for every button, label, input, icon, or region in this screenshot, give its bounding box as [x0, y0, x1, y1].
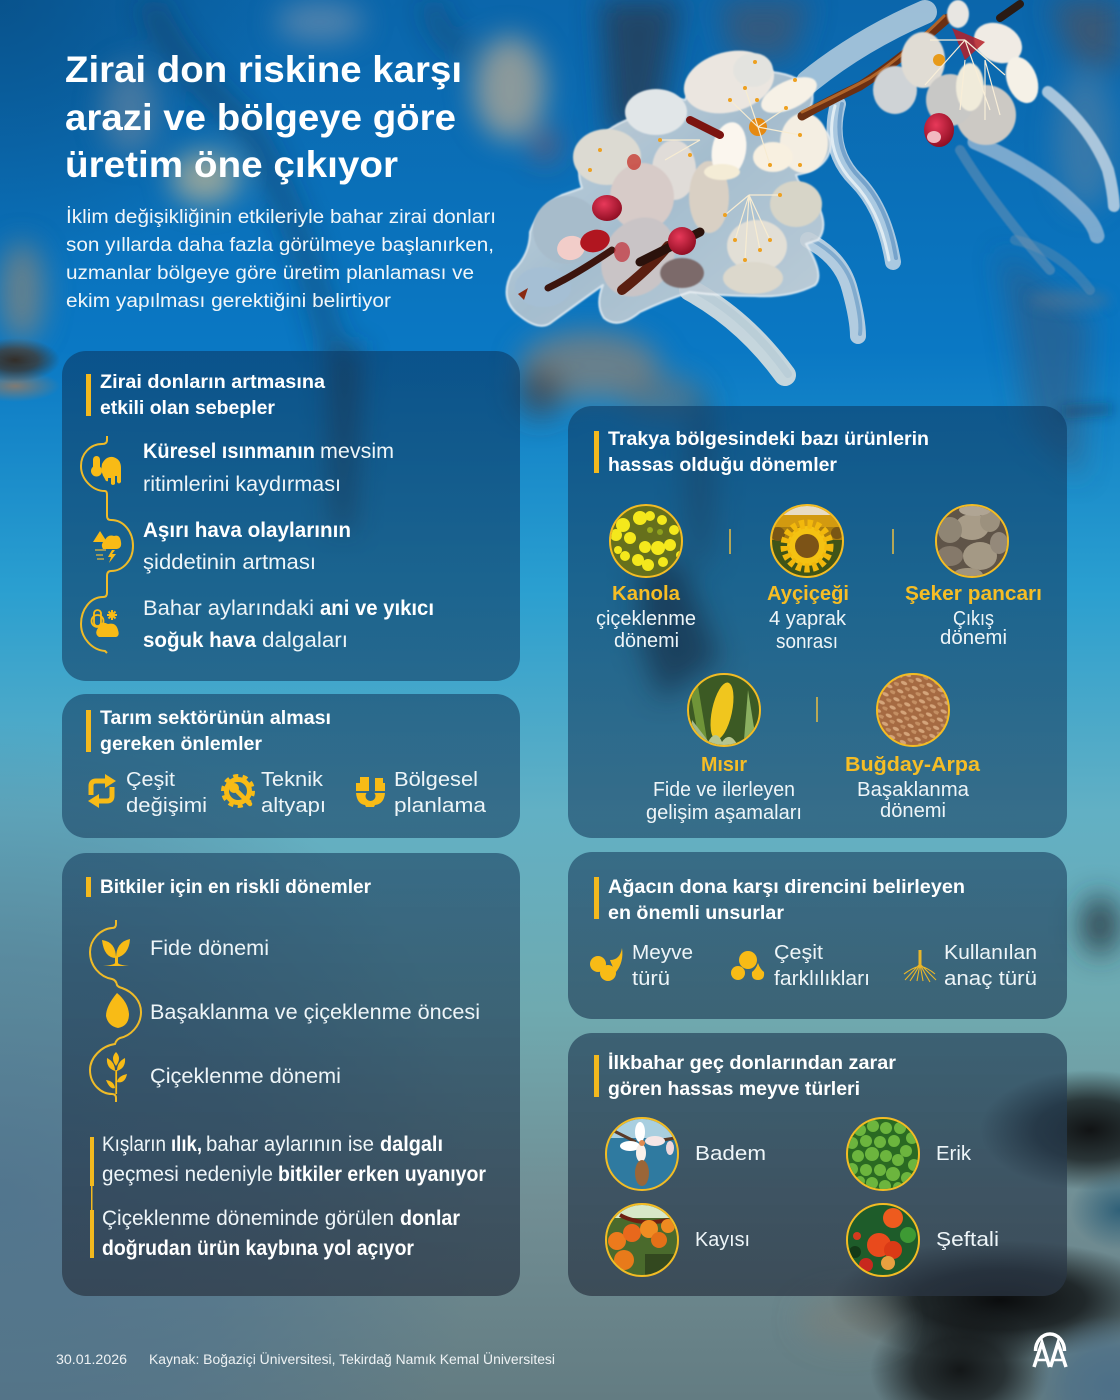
photo: wheat and barley: [877, 674, 949, 746]
logo: AA: [1034, 1334, 1066, 1367]
text: flowering period: Çiçeklenme dönemi: [150, 1065, 341, 1088]
buds: [518, 154, 696, 300]
note: mild winters: ılık,: [171, 1133, 202, 1156]
text: corn: Mısır: [701, 754, 747, 776]
photo: peach: [847, 1204, 919, 1276]
text: global warming: mevsim: [320, 440, 394, 463]
intro text: uzmanlar bölgeye göre üretim planlaması ve: [66, 263, 474, 284]
text: regional planning: Bölgesel: [394, 769, 478, 791]
panel: causes of frost: [62, 351, 520, 681]
note: mild winters: [90, 1133, 486, 1210]
petals of main cluster: [515, 41, 828, 311]
icon: apple, orange and pear: [731, 951, 764, 980]
text: technical infrastructure: [261, 769, 326, 817]
text: plum: Erik: [936, 1143, 972, 1165]
photo: almond: [605, 1118, 679, 1190]
text: regional planning: [394, 769, 487, 817]
text: cold waves: [143, 597, 434, 652]
wavy connector: [81, 436, 133, 653]
text: regional planning: planlama: [394, 795, 487, 817]
note: mild winters: Kışların: [102, 1133, 166, 1156]
panel: Thrace crops: [568, 406, 1067, 838]
text: almond: Badem: [695, 1143, 766, 1165]
heading: causes: [86, 371, 325, 419]
text: global warming: [143, 440, 394, 496]
text: wheat and barley: Buğday-Arpa: [845, 754, 981, 776]
text: heading and pre-flowering: Başaklanma ve çiçeklenme öncesi: [150, 1001, 480, 1024]
text: extreme weather: şiddetinin artması: [143, 551, 316, 574]
footer: date and source: Kaynak: Boğaziçi Üniversitesi, Tekirdağ Namık Kemal Üniversitesi: [149, 1352, 555, 1367]
icon: leaf: [106, 993, 129, 1028]
photo: iced apricot blossoms: [507, 0, 1114, 375]
text: corn: [646, 754, 802, 824]
footer: date and source: 30.01.2026: [56, 1352, 127, 1367]
text: technical infrastructure: Teknik: [261, 769, 324, 791]
text: sunflower: Ayçiçeği: [767, 583, 849, 605]
intro text: [66, 207, 496, 312]
text: fruit type: [632, 942, 693, 990]
icon: melting globe and thermometer: [91, 456, 121, 485]
text: variety differences: farklılıkları: [774, 968, 870, 990]
text: apricot: Kayısı: [695, 1229, 750, 1251]
title: Zirai don riskine karşı: [65, 49, 462, 90]
heading: resistance factors: [594, 876, 965, 924]
note: mild winters: bitkiler erken uyanıyor: [278, 1163, 486, 1186]
icon: cold thermometer and snowflake: [92, 610, 119, 637]
note: mild winters: bahar aylarının ise: [206, 1133, 374, 1156]
text: canola: [596, 583, 696, 652]
text: sugar beet: dönemi: [940, 627, 1007, 649]
text: variety change: değişimi: [126, 795, 207, 817]
text: variety differences: Çeşit: [774, 942, 823, 964]
text: wheat and barley: dönemi: [880, 800, 946, 822]
text: cold waves: ani ve yıkıcı: [320, 597, 434, 620]
intro text: son yıllarda daha fazla görülmeye başlanırken,: [66, 235, 494, 256]
text: cold waves: dalgaları: [262, 629, 348, 652]
heading: sensitive fruits: İlkbahar geç donlarından zarar: [608, 1051, 896, 1074]
heading: resistance factors: Ağacın dona karşı direncini belirleyen: [608, 876, 965, 898]
photo: canola: [610, 505, 684, 577]
photo: apricot: [605, 1204, 679, 1278]
text: sunflower: [767, 583, 849, 653]
text: canola: çiçeklenme: [596, 608, 696, 630]
text: peach: Şeftali: [936, 1229, 999, 1251]
note: frost during flowering: doğrudan ürün kaybına yol açıyor: [102, 1237, 414, 1260]
heading: measures: [86, 707, 331, 755]
text: cold waves: soğuk hava: [143, 629, 256, 652]
icon: gear with wrench: [223, 776, 253, 806]
intro text: ekim yapılması gerektiğini belirtiyor: [66, 291, 392, 312]
text: canola: dönemi: [614, 630, 679, 652]
text: variety change: [126, 769, 207, 817]
heading: Thrace: hassas olduğu dönemler: [608, 454, 837, 476]
title: arazi ve bölgeye göre: [65, 97, 456, 138]
panel: sensitive fruits: [568, 1033, 1067, 1296]
heading: Thrace: Trakya bölgesindeki bazı ürünlerin: [608, 428, 929, 450]
dividers between crops: [730, 529, 893, 722]
text: rootstock type: Kullanılan: [944, 942, 1037, 964]
text: wheat and barley: [845, 754, 981, 822]
text: wheat and barley: Başaklanma: [857, 779, 970, 801]
text: extreme weather: [143, 519, 351, 574]
note: mild winters: geçmesi nedeniyle: [102, 1163, 273, 1186]
title: [65, 49, 462, 185]
heading: measures: gereken önlemler: [100, 733, 262, 755]
text: global warming: ritimlerini kaydırması: [143, 473, 341, 496]
text: seedling period: Fide dönemi: [150, 937, 269, 960]
heading: causes: Zirai donların artmasına: [100, 371, 325, 393]
title: üretim öne çıkıyor: [65, 144, 398, 185]
heading: sensitive fruits: gören hassas meyve türleri: [608, 1078, 860, 1100]
icon: flowering stem: [106, 1052, 127, 1094]
text: rootstock type: anaç türü: [944, 968, 1037, 990]
flower, upper right: [873, 0, 1044, 147]
text: rootstock type: [944, 942, 1037, 990]
heading: sensitive fruits: [594, 1051, 896, 1100]
text: variety differences: [774, 942, 870, 990]
text: technical infrastructure: altyapı: [261, 795, 326, 817]
branches: [548, 4, 1020, 290]
text: sunflower: 4 yaprak: [769, 608, 847, 630]
panel: sector measures: [62, 694, 520, 838]
text: sugar beet: Çıkış: [953, 608, 994, 630]
photo: plum: [846, 1118, 920, 1192]
heading: Thrace: [594, 428, 929, 476]
note: frost during flowering: Çiçeklenme döneminde görülen: [102, 1207, 394, 1230]
note: frost during flowering: donlar: [400, 1207, 460, 1230]
stamens: [588, 60, 802, 262]
ice body: [507, 56, 831, 326]
text: global warming: Küresel ısınmanın: [143, 440, 315, 463]
heading: resistance factors: en önemli unsurlar: [608, 902, 784, 924]
text: sugar beet: [905, 583, 1042, 649]
text: fruit type: Meyve: [632, 942, 693, 964]
note: mild winters: dalgalı: [380, 1133, 443, 1156]
wavy connector: [90, 920, 141, 1102]
icon: storm warning: [93, 531, 121, 563]
text: fruit type: türü: [632, 968, 670, 990]
blurred right icicles: [960, 92, 1114, 290]
heading: risky periods: Bitkiler için en riskli dönemler: [100, 876, 371, 898]
text: sunflower: sonrası: [776, 631, 838, 653]
panel: risky periods: [62, 853, 520, 1296]
heading: causes: etkili olan sebepler: [100, 397, 275, 419]
text: sugar beet: Şeker pancarı: [905, 583, 1042, 605]
photo: corn: [688, 674, 760, 746]
panel: frost resistance factors: [568, 852, 1067, 1019]
heading: measures: Tarım sektörünün alması: [100, 707, 331, 729]
icicles: [690, 12, 925, 375]
icon: seedling: [102, 939, 130, 966]
icon: roots: [904, 950, 936, 982]
text: variety change: Çeşit: [126, 769, 175, 791]
note: frost during flowering: [90, 1207, 460, 1260]
text: canola: Kanola: [612, 583, 681, 605]
photo: sugar beet: [936, 504, 1008, 582]
icon: fruits: [590, 948, 622, 981]
icon: swap arrows: [88, 774, 116, 808]
text: cold waves: Bahar aylarındaki: [143, 597, 314, 620]
text: corn: gelişim aşamaları: [646, 802, 802, 824]
text: extreme weather: Aşırı hava olaylarının: [143, 519, 351, 542]
icon: city in gear: [356, 777, 385, 807]
intro text: İklim değişikliğinin etkileriyle bahar zirai donları: [66, 207, 496, 228]
text: corn: Fide ve ilerleyen: [653, 779, 795, 801]
photo: sunflower: [770, 504, 844, 580]
